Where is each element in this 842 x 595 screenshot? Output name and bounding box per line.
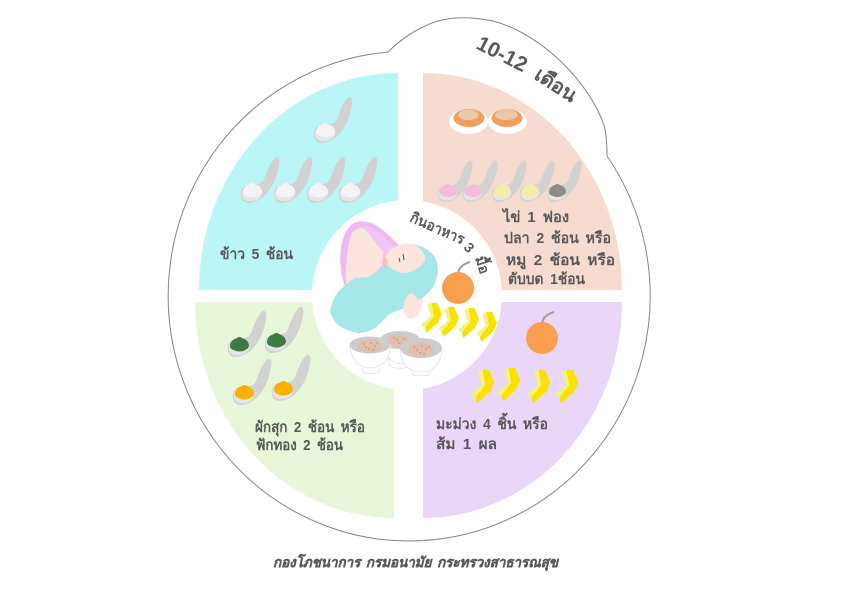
heading: age: 10-12 (473, 32, 531, 77)
icon: rice spoons (240, 97, 377, 203)
text: fruit amounts: มะม่วง 4 ชิ้น หรือ (436, 412, 548, 433)
icon: vegetable spoons (227, 307, 310, 405)
icon: orange in centre (442, 262, 474, 304)
text: protein amounts (501, 207, 615, 288)
heading: three meals curved: กินอาหาร (407, 209, 467, 248)
text: protein amounts: ตับบด 1ช้อน (508, 271, 586, 288)
panel: vegetable quadrant (195, 302, 394, 518)
icon: mango pieces in centre (421, 303, 497, 342)
text: vegetable amounts (255, 419, 365, 454)
heading: three meals curved (407, 209, 496, 276)
text: fruit amounts (436, 412, 548, 453)
footer: credit: กองโภชนาการ กรมอนามัย กระทรวงสาธารณสุข (273, 553, 559, 571)
icon: mango pieces in fruit panel (471, 368, 578, 403)
heading: age: เดือน (530, 63, 581, 107)
icon: rice bowls (350, 331, 442, 376)
text: vegetable amounts: ฟักทอง 2 ช้อน (256, 437, 344, 454)
text: protein amounts: ปลา 2 ช้อน หรือ (504, 230, 611, 247)
panel: fruit quadrant (423, 302, 622, 518)
text: protein amounts: ไข่ 1 ฟอง (501, 207, 569, 226)
icon: orange in fruit panel (526, 312, 558, 354)
text: rice amount: ข้าว 5 ช้อน (220, 246, 294, 263)
icon: eggs (449, 109, 527, 134)
panel: rice quadrant (199, 73, 398, 290)
text: vegetable amounts: ผักสุก 2 ช้อน หรือ (255, 419, 365, 437)
text: protein amounts: หมู 2 ช้อน หรือ (506, 252, 615, 270)
icon: mother and baby (330, 221, 438, 333)
centre white circle (312, 200, 502, 390)
heading: age (473, 32, 581, 107)
plate outline with tab (168, 18, 650, 541)
heading: three meals curved: มื้อ (472, 253, 496, 276)
icon: protein spoons (437, 160, 582, 202)
heading: three meals curved: 3 (461, 239, 478, 256)
text: fruit amounts: ส้ม 1 ผล (436, 436, 497, 453)
panel: protein quadrant (423, 73, 622, 290)
